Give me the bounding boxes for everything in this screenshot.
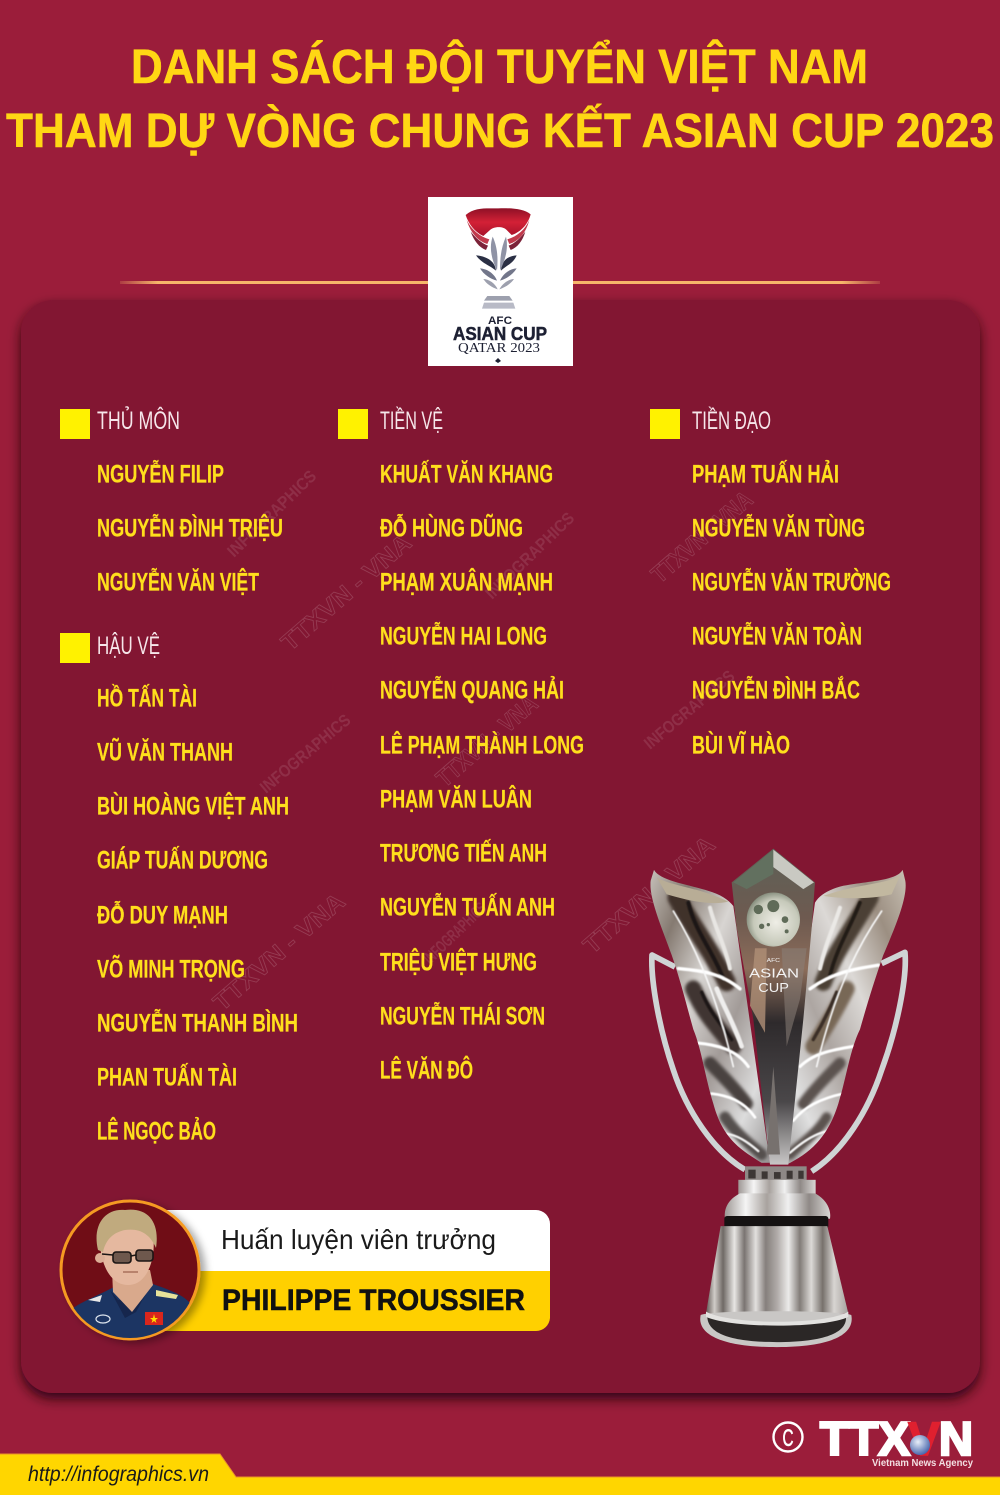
heading: forwards: TIỀN ĐẠO xyxy=(692,406,771,435)
yellow name bar xyxy=(150,1271,550,1331)
forward names: NGUYỄN ĐÌNH BẮC xyxy=(692,674,860,704)
midfielder names: ĐỖ HÙNG DŨNG xyxy=(380,512,523,542)
title xyxy=(6,39,994,158)
watermarks: TTXVN - VNA xyxy=(208,888,350,1017)
left and right handles xyxy=(652,952,905,1171)
AFC Asian Cup logo: QATAR 2023 xyxy=(458,340,540,355)
website url: http://infographics.vn xyxy=(28,1463,209,1486)
defender names: VŨ VĂN THANH xyxy=(97,736,233,766)
sponsor badge xyxy=(96,1315,110,1323)
AFC Asian Cup logo: ASIAN CUP xyxy=(453,324,547,344)
forward names xyxy=(692,458,891,760)
midfielder names: KHUẤT VĂN KHANG xyxy=(380,460,553,488)
face xyxy=(100,1230,154,1285)
flag badge xyxy=(145,1312,163,1325)
midfielder names: NGUYỄN QUANG HẢI xyxy=(380,674,564,704)
TTXVN logo: Vietnam News Agency xyxy=(872,1458,973,1469)
trophy illustration xyxy=(647,849,910,1347)
coach portrait xyxy=(60,1201,200,1345)
copyright symbol xyxy=(774,1422,802,1452)
white title bar xyxy=(150,1210,550,1271)
glasses xyxy=(113,1250,153,1263)
TTXVN logo: V xyxy=(908,1412,941,1465)
forward names: NGUYỄN VĂN TÙNG xyxy=(692,512,865,542)
watermarks: TTXVN - VNA xyxy=(431,690,543,793)
midfielder names: TRƯƠNG TIẾN ANH xyxy=(380,838,547,868)
neck xyxy=(112,1270,153,1312)
defender names: GIÁP TUẤN DƯƠNG xyxy=(97,846,268,874)
forward names: BÙI VĨ HÀO xyxy=(692,730,790,760)
TTXVN logo: N xyxy=(939,1412,973,1465)
goalkeeper names: NGUYỄN ĐÌNH TRIỆU xyxy=(97,512,283,542)
base xyxy=(745,1166,807,1181)
watermarks: INFOGRAPHICS xyxy=(224,467,320,561)
coach name plate xyxy=(150,1210,550,1331)
midfielder names: TRIỆU VIỆT HƯNG xyxy=(380,946,537,976)
trophy illustration: AFC xyxy=(767,958,780,964)
heading: defenders: HẬU VỆ xyxy=(97,631,160,660)
watermarks: INFOGRAPHICS xyxy=(256,711,354,797)
watermarks: INFOGRAPHICS xyxy=(420,899,490,968)
AFC Asian Cup logo xyxy=(428,197,573,366)
watermarks: TTXVN - VNA xyxy=(646,486,758,589)
defender names: HỒ TẤN TÀI xyxy=(97,682,197,712)
goalkeeper names: NGUYỄN FILIP xyxy=(97,458,224,488)
goalkeeper names xyxy=(97,458,283,596)
midfielder names: NGUYỄN TUẤN ANH xyxy=(380,892,555,922)
centre blade xyxy=(732,849,815,1165)
TTXVN logo xyxy=(820,1412,973,1469)
heading: goalkeepers xyxy=(60,405,180,439)
AFC Asian Cup logo: AFC xyxy=(488,315,512,327)
midfielder names: PHẠM XUÂN MẠNH xyxy=(380,566,553,596)
forward names: NGUYỄN VĂN TOÀN xyxy=(692,620,862,650)
column: goalkeepers and defenders xyxy=(60,405,298,1146)
panel: squad list xyxy=(21,300,980,1393)
midfielder names xyxy=(380,460,584,1084)
goalkeeper names: NGUYỄN VĂN VIỆT xyxy=(97,566,259,596)
hair xyxy=(97,1210,157,1252)
TTXVN logo: TTX xyxy=(820,1412,910,1465)
heading: midfielders xyxy=(338,406,443,439)
defender names: LÊ NGỌC BẢO xyxy=(97,1116,216,1146)
forward names: NGUYỄN VĂN TRƯỜNG xyxy=(692,566,891,596)
defender names xyxy=(97,682,298,1146)
coach name plate: Huấn luyện viên trưởng xyxy=(221,1224,496,1255)
watermarks: TTXVN - VNA xyxy=(276,529,417,657)
defender names: ĐỖ DUY MẠNH xyxy=(97,900,228,930)
midfielder names: LÊ PHẠM THÀNH LONG xyxy=(380,730,584,760)
right wing xyxy=(788,870,906,1164)
mouth xyxy=(123,1271,138,1273)
defender names: NGUYỄN THANH BÌNH xyxy=(97,1008,298,1038)
footer band xyxy=(0,1454,1000,1495)
watermarks: INFOGRAPHICS xyxy=(640,667,738,753)
midfielder names: PHẠM VĂN LUÂN xyxy=(380,784,532,814)
column: forwards xyxy=(650,406,891,760)
coach name plate: PHILIPPE TROUSSIER xyxy=(222,1284,525,1317)
watermarks: INFOGRAPHICS xyxy=(482,509,578,603)
midfielder names: NGUYỄN HAI LONG xyxy=(380,620,547,650)
defender names: PHAN TUẤN TÀI xyxy=(97,1062,237,1092)
watermarks xyxy=(208,467,758,1017)
shirt xyxy=(74,1284,190,1338)
column: midfielders xyxy=(338,406,584,1084)
midfielder names: NGUYỄN THÁI SƠN xyxy=(380,1000,545,1030)
defender names: VÕ MINH TRỌNG xyxy=(97,954,245,984)
forward names: PHẠM TUẤN HẢI xyxy=(692,458,839,488)
title: DANH SÁCH ĐỘI TUYỂN VIỆT NAM xyxy=(131,39,868,94)
midfielder names: LÊ VĂN ĐÔ xyxy=(380,1054,473,1084)
wing rim highlights xyxy=(657,877,728,903)
watermarks: TTXVN - VNA xyxy=(578,831,720,960)
heading: defenders xyxy=(60,631,160,663)
globe xyxy=(747,893,800,947)
trophy illustration: ASIAN xyxy=(749,966,799,980)
heading: midfielders: TIỀN VỆ xyxy=(380,406,443,435)
copyright symbol: C xyxy=(782,1425,794,1452)
heading: goalkeepers: THỦ MÔN xyxy=(97,405,180,435)
left wing xyxy=(647,864,773,1168)
defender names: BÙI HOÀNG VIỆT ANH xyxy=(97,790,289,820)
heading: forwards xyxy=(650,406,771,439)
trophy illustration: CUP xyxy=(758,981,789,995)
